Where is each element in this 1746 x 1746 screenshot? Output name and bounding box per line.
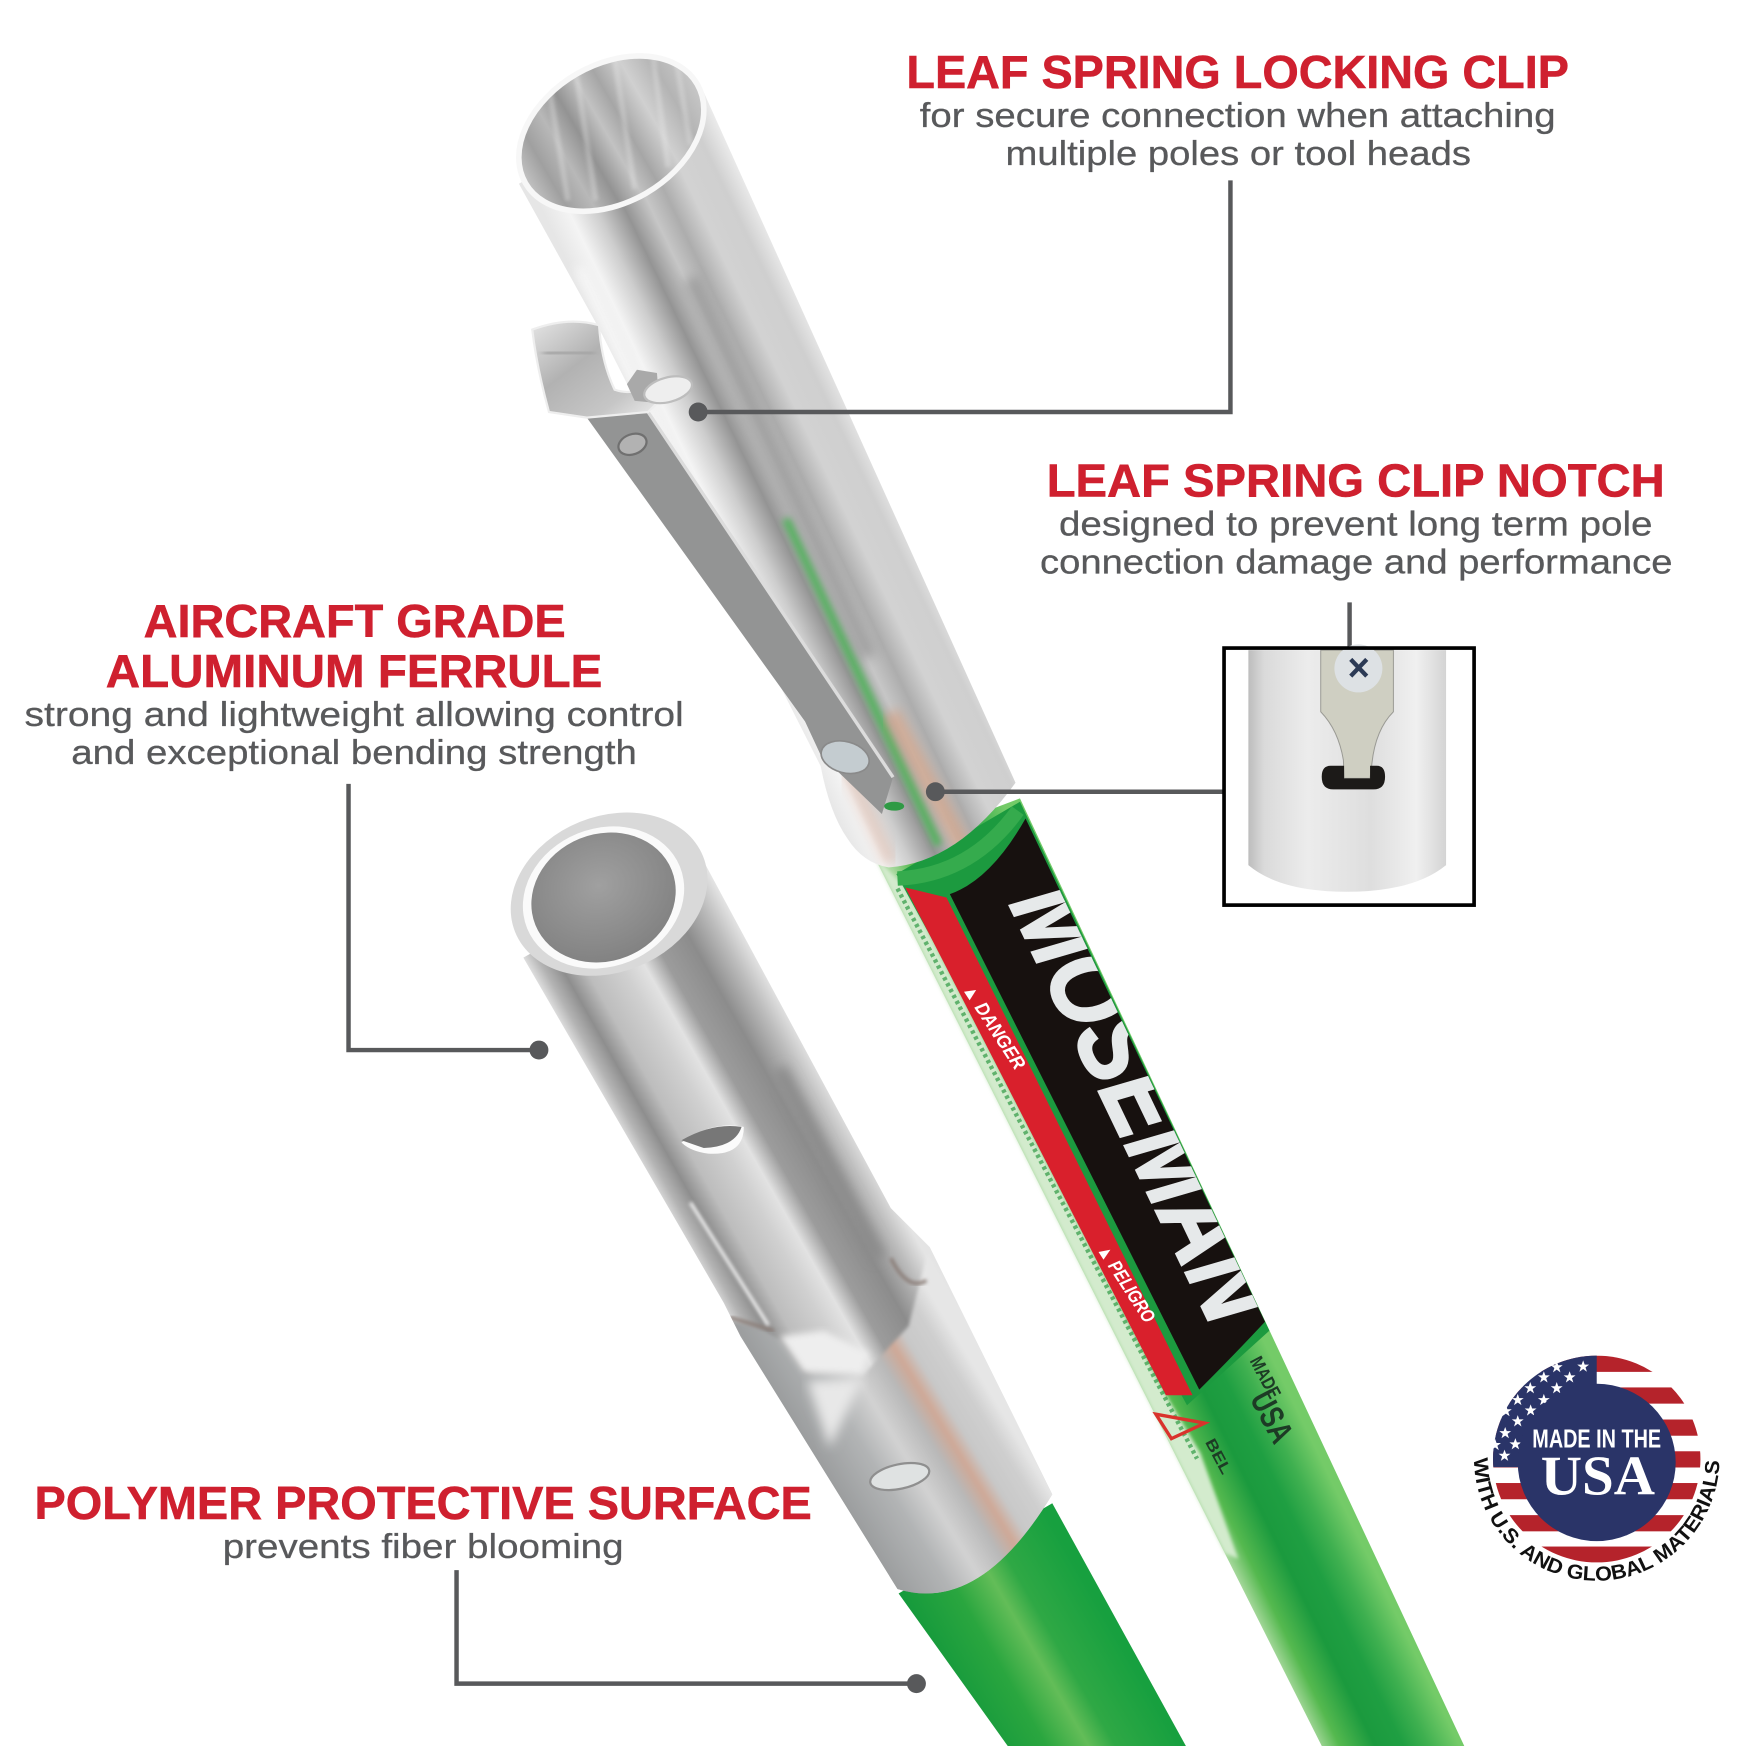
lower sleeve [690, 1069, 1069, 1626]
inset frame [1224, 648, 1474, 905]
leader line: locking clip [689, 180, 1230, 421]
tube opening [491, 24, 732, 243]
green pole body [873, 798, 1464, 1746]
callout: polymer protective surface [35, 1477, 812, 1566]
leader line: notch to inset [1348, 602, 1352, 650]
description line 1: strong and lightweight allowing control [24, 696, 684, 734]
heading: LEAF SPRING LOCKING CLIP [906, 46, 1569, 98]
green stripe under label [896, 802, 1269, 1405]
usa pole print: USA [1242, 1385, 1300, 1450]
notch opening [641, 372, 695, 408]
callout: aircraft grade aluminum ferrule [24, 595, 684, 772]
description line 2: multiple poles or tool heads [1006, 135, 1471, 173]
leaf spring locking clip [532, 322, 904, 814]
curved tagline: WITH U.S. AND GLOBAL MATERIALS [1474, 1457, 1720, 1581]
danger label: ▲ DANGER [958, 980, 1029, 1074]
tube reflections [579, 267, 969, 863]
leader line: ferrule [349, 784, 548, 1060]
red danger stripe [905, 887, 1193, 1395]
description: prevents fiber blooming [223, 1528, 624, 1566]
lower rivet [868, 1458, 932, 1495]
heading line 2: ALUMINUM FERRULE [106, 645, 602, 697]
screw [1334, 644, 1382, 692]
flag circle [1492, 1354, 1702, 1566]
pale translucent strip [873, 854, 1238, 1559]
opening interior streaks [546, 45, 690, 200]
rim highlight [501, 803, 706, 992]
navy center circle [1518, 1384, 1676, 1541]
flag stars [1489, 1360, 1589, 1461]
lock hole [681, 1125, 744, 1154]
clip strap [587, 412, 893, 814]
lower tube body [523, 857, 1052, 1593]
heading: POLYMER PROTECTIVE SURFACE [35, 1477, 812, 1529]
upper aluminum ferrule tube [491, 24, 1018, 879]
notch slot [1322, 766, 1385, 789]
opening rim [491, 24, 732, 243]
main fiberglass pole [873, 798, 1464, 1746]
inset photo: clip notch [1224, 644, 1474, 905]
description line 2: connection damage and performance [1040, 543, 1673, 581]
USA: USA [1541, 1446, 1655, 1507]
leader line: polymer surface [457, 1570, 926, 1693]
tube body [519, 82, 1016, 867]
lower pole green shaft [899, 1503, 1186, 1746]
tube hole [512, 811, 695, 984]
description line 1: designed to prevent long term pole [1059, 506, 1652, 544]
speckled print edge [897, 889, 1197, 1459]
callout: leaf spring clip notch [1040, 455, 1673, 581]
small warning print: BEL [1201, 1436, 1234, 1478]
inset cylinder [1248, 650, 1446, 892]
made in usa pole print: MADE [1245, 1353, 1284, 1402]
callout: leaf spring locking clip [906, 46, 1569, 173]
clip inner edge highlight [648, 412, 893, 777]
clip tab [1321, 650, 1393, 778]
black label stripe [950, 818, 1265, 1390]
cylinder shadow streak [1255, 650, 1271, 797]
hook knurl shadow [543, 352, 595, 354]
lower aluminum ferrule tube [510, 812, 1052, 1594]
description line 2: and exceptional bending strength [71, 734, 637, 772]
heading: LEAF SPRING CLIP NOTCH [1047, 455, 1665, 507]
clip pin [627, 370, 659, 403]
bottom screw [817, 736, 873, 779]
clip hook [532, 322, 657, 418]
bottom slot [884, 802, 904, 811]
badge: made in the USA [1474, 1356, 1720, 1581]
green band at ferrule end [897, 811, 1018, 879]
brand wordmark: MOSEMAN [988, 862, 1301, 1342]
made in the: MADE IN THE [1532, 1426, 1661, 1454]
leader line: notch on tube [926, 782, 1225, 801]
top rivet [615, 430, 650, 459]
peligro label: ▲ PELIGRO [1093, 1241, 1159, 1327]
heading line 1: AIRCRAFT GRADE [144, 595, 566, 647]
warning triangle print [1156, 1414, 1205, 1439]
lower tube rim [486, 784, 732, 1004]
description line 1: for secure connection when attaching [920, 97, 1556, 135]
